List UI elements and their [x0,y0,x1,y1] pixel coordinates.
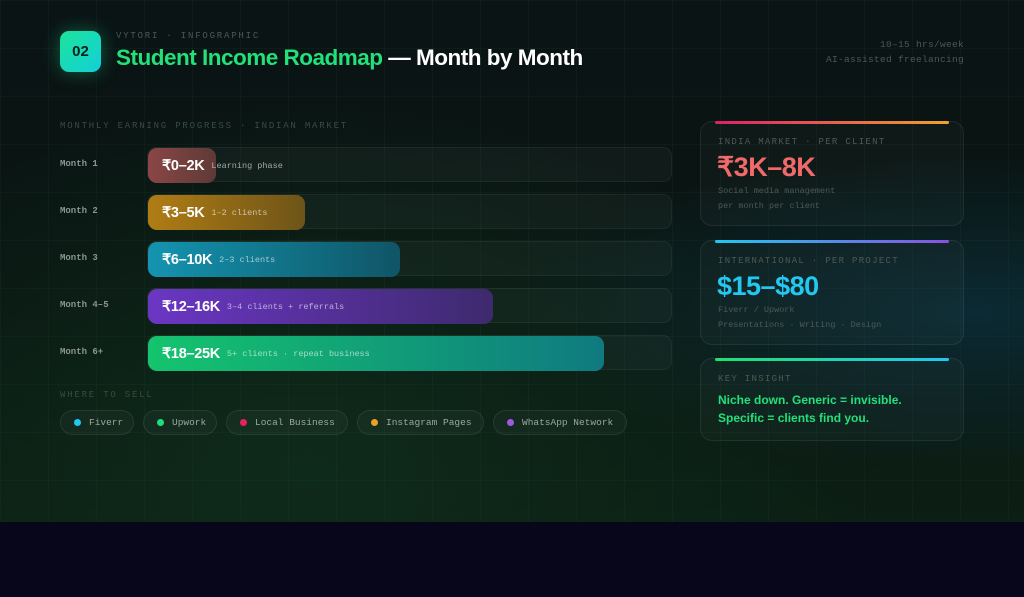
badge: 02 [60,31,101,72]
badge: 02: 02 [72,43,89,60]
meta text [826,39,964,65]
bar: month 4-5: ₹12–16K [162,298,220,314]
card: key insight: KEY INSIGHT [718,374,792,384]
card: international: Fiverr / Upwork [718,305,795,315]
bar: month 3 [147,241,672,276]
bar: month 3: ₹6–10K [162,252,212,268]
bar: month 2 [147,194,672,229]
card: India market: per month per client [718,201,820,211]
card: India market: ₹3K–8K [717,152,815,182]
chip: WhatsApp Network [493,410,627,435]
bar: month 1: ₹0–2K [162,158,204,174]
chip: Instagram Pages [357,410,484,435]
bar: month 1 [147,147,672,182]
chip: Upwork: Upwork [172,417,206,428]
chip: Instagram Pages: Instagram Pages [386,417,472,428]
bar: month 6+ [147,335,672,370]
bar: month 2: 1–2 clients [211,208,268,218]
bar: month 4-5 [147,288,672,323]
card: international [700,240,964,345]
section label: MONTHLY EARNING PROGRESS · INDIAN MARKET [60,121,348,131]
eyebrow: VYTORI · INFOGRAPHIC [116,31,260,41]
card: international: $15–$80 [717,271,819,301]
chip: Local Business: Local Business [255,417,335,428]
card: key insight [700,358,964,441]
chip: Fiverr: Fiverr [89,417,123,428]
card: India market: Social media management [718,186,835,196]
bar chart [60,147,672,369]
chip: Fiverr [60,410,134,435]
bar: month 6+: ₹18–25K [162,346,220,362]
chip: Local Business [226,410,348,435]
card: key insight: Niche down. Generic = invisible. [718,393,902,407]
chip: WhatsApp Network: WhatsApp Network [522,417,613,428]
card: India market: INDIA MARKET · PER CLIENT [718,137,886,147]
card: international: Presentations · Writing · Design [718,320,881,330]
meta text: AI-assisted freelancing [826,54,964,65]
bar: month 4-5: 3–4 clients + referrals [227,302,344,312]
title: Student Income Roadmap — Month by Month [116,45,583,70]
text: Month 6+ [60,347,103,357]
card: India market [700,121,964,226]
card: international: INTERNATIONAL · PER PROJECT [718,256,899,266]
text: Month 3 [60,253,98,263]
bar: month 6+: 5+ clients · repeat business [227,348,370,358]
text: Month 4–5 [60,300,109,310]
text: Month 2 [60,206,98,216]
bar: month 1: Learning phase [211,160,283,170]
month labels: Month 1 [60,159,98,169]
chip: Upwork [143,410,217,435]
card: key insight: Specific = clients find you. [718,411,869,425]
bar: month 2: ₹3–5K [162,204,204,220]
section label: where to sell: WHERE TO SELL [60,390,154,400]
bar: month 3: 2–3 clients [219,254,275,264]
meta text: 10–15 hrs/week [880,39,964,50]
